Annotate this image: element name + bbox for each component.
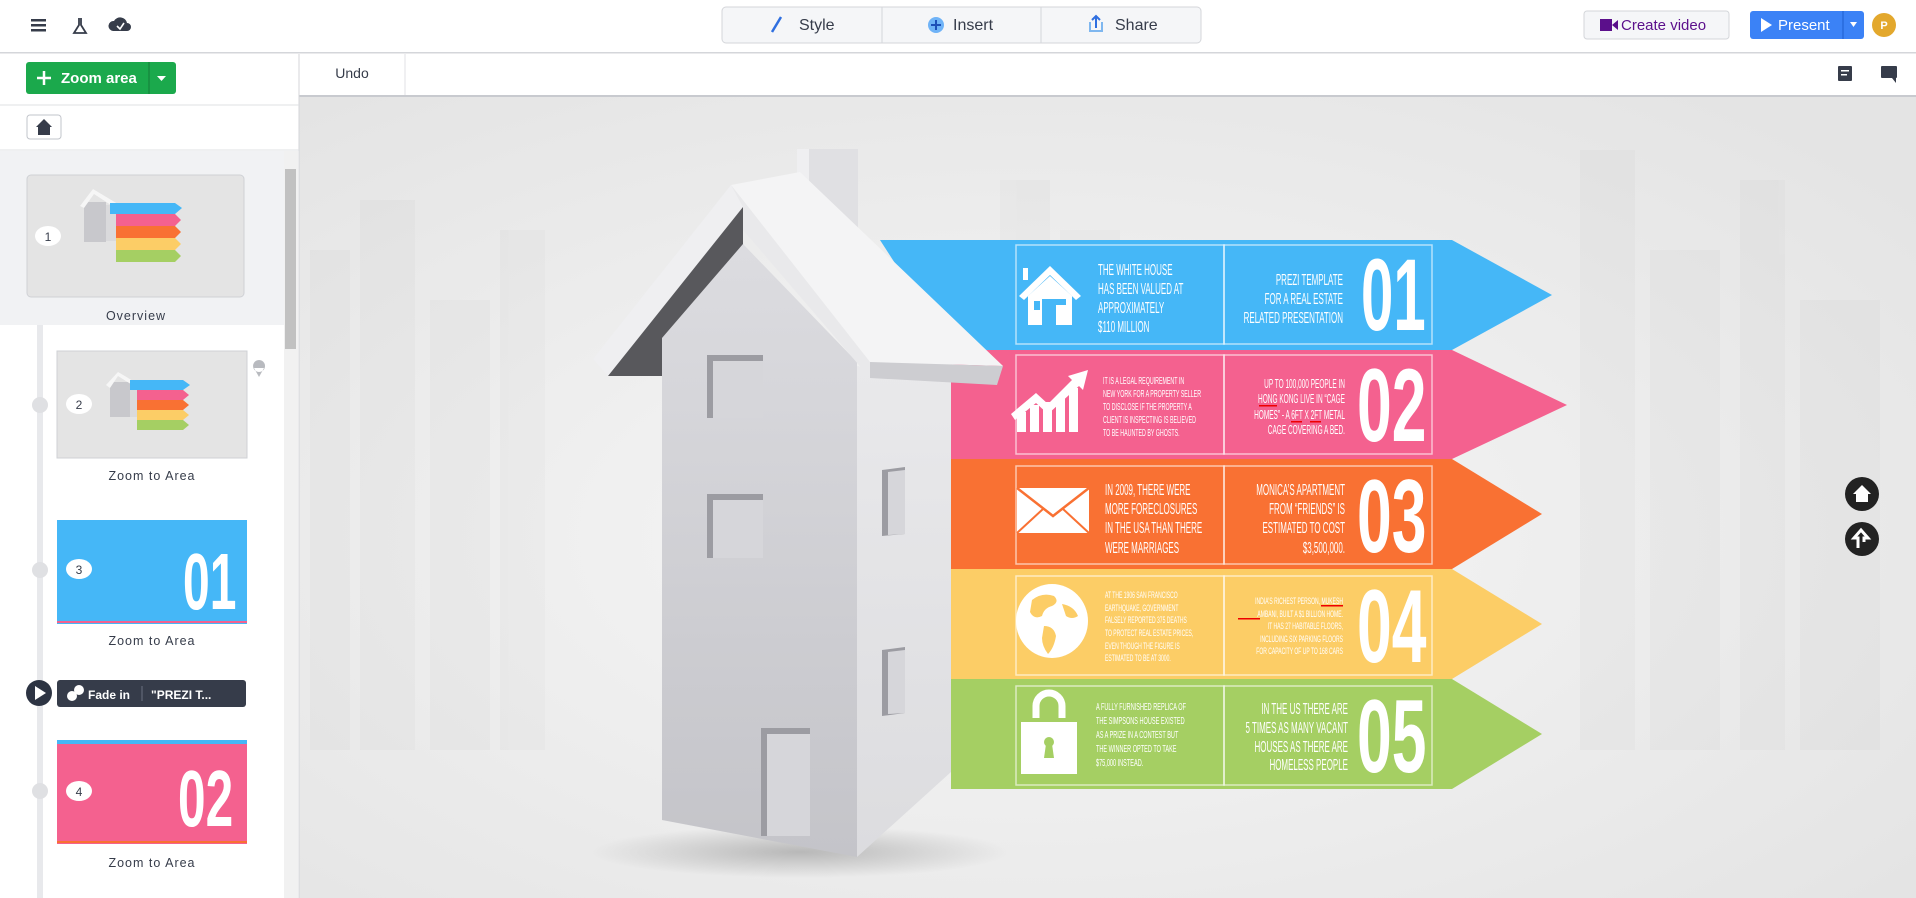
icon: house [1019, 266, 1081, 325]
band 3 orange [951, 459, 1542, 575]
thumbnail 2 [32, 351, 265, 458]
button: create video [1584, 11, 1729, 39]
text: foreclosures: WERE MARRIAGES [1105, 539, 1179, 557]
text: ambani: INDIA’S RICHEST PERSON, MUKESH [1255, 595, 1343, 606]
icon: flask [74, 18, 86, 33]
text: vacant houses [1245, 700, 1348, 774]
text: foreclosures [1105, 481, 1202, 557]
button: present: Present [1778, 17, 1831, 34]
text: cage homes [1254, 378, 1345, 438]
text: legal requirement: TO BE HAUNTED BY GHOSTS. [1103, 427, 1180, 438]
thumbnail 3: 01: 01 [183, 536, 236, 626]
number 02: 02 [1357, 348, 1426, 464]
icon: globe [1016, 584, 1088, 658]
canvas background [299, 96, 1916, 898]
label: overview: Overview [106, 309, 166, 323]
text: white house: $110 MILLION [1098, 318, 1149, 336]
band 5 green [951, 679, 1542, 795]
number 04: 04 [1357, 569, 1427, 685]
text: monica [1256, 481, 1345, 557]
thumbnail 1: overview [27, 175, 244, 297]
text: vacant houses: IN THE US THERE ARE [1261, 700, 1348, 718]
text: vacant houses: HOMELESS PEOPLE [1269, 756, 1348, 774]
timeline [37, 325, 43, 898]
scrollbar [284, 151, 298, 898]
canvas nav buttons [1845, 477, 1879, 556]
avatar: P [1880, 20, 1888, 32]
toolbar group: style insert share: Insert [953, 17, 994, 34]
text: simpsons: THE WINNER OPTED TO TAKE [1096, 742, 1177, 754]
button: home [27, 115, 61, 139]
band 2 pink [951, 348, 1567, 464]
thumbnail 3: 01 [32, 520, 247, 626]
text: legal requirement: CLIENT IS INSPECTING IS BELIEVED [1103, 414, 1196, 425]
animation bar: fade in: Fade in [88, 688, 130, 702]
text: legal requirement: NEW YORK FOR A PROPERTY SELLER [1103, 388, 1201, 399]
toolbar group: style insert share [722, 7, 1201, 43]
text: earthquake: TO PROTECT REAL ESTATE PRICES, [1105, 627, 1193, 638]
text: legal requirement [1103, 375, 1201, 438]
thumbnail 3: 01: 3 [76, 563, 83, 577]
text: simpsons: AS A PRIZE IN A CONTEST BUT [1096, 728, 1178, 740]
text: simpsons: THE SIMPSONS HOUSE EXISTED [1096, 714, 1185, 726]
text: legal requirement: TO DISCLOSE IF THE PROPERTY A [1103, 401, 1192, 412]
text: earthquake: EARTHQUAKE, GOVERNMENT [1105, 602, 1179, 613]
text: monica: MONICA’S APARTMENT [1256, 481, 1345, 499]
text: white house [1098, 261, 1184, 336]
text: earthquake: ESTIMATED TO BE AT 3000. [1105, 652, 1171, 663]
label: zoom to area 2: Zoom to Area [108, 469, 196, 483]
animation bar: fade in: "PREZI T... [151, 688, 211, 702]
button: zoom area [26, 62, 176, 94]
text: simpsons: $75,000 INSTEAD. [1096, 756, 1143, 768]
label: zoom to area 4: Zoom to Area [108, 856, 196, 870]
thumbnail 4: 02: 4 [76, 785, 83, 799]
text: vacant houses: 5 TIMES AS MANY VACANT [1245, 719, 1348, 737]
icon: lock [1021, 693, 1077, 774]
icon: cloud [108, 17, 131, 31]
text: ambani [1238, 595, 1343, 656]
house illustration [590, 149, 1010, 878]
text: monica: ESTIMATED TO COST [1262, 519, 1345, 537]
text: ambani: INCLUDING SIX PARKING FLOORS [1260, 633, 1343, 644]
number 03: 03 [1357, 459, 1426, 575]
thumbnail 1: overview: 1 [45, 230, 52, 244]
label: zoom to area 3: Zoom to Area [108, 634, 196, 648]
thumbnail 4: 02: 02 [178, 755, 233, 844]
button: present [1750, 11, 1864, 39]
text: foreclosures: IN 2009, THERE WERE [1105, 481, 1191, 499]
text: simpsons [1096, 700, 1186, 768]
text: earthquake: FALSELY REPORTED 375 DEATHS [1105, 614, 1187, 625]
text: cage homes: CAGE COVERING A BED. [1268, 424, 1345, 438]
text: prezi template [1244, 271, 1343, 327]
icon: chart [1011, 370, 1088, 432]
thumbnail 4: 02 [32, 740, 247, 844]
icon: envelope [1017, 488, 1089, 533]
text: ambani: AMBANI, BUILT A $1 BILLION HOME. [1257, 608, 1343, 619]
animation bar: fade in [26, 680, 246, 707]
text: ambani: FOR CAPACITY OF UP TO 168 CARS [1256, 645, 1343, 656]
toolbar group: style insert share: Style [799, 17, 835, 34]
secondary toolbar: Undo [335, 65, 369, 81]
text: earthquake: AT THE 1906 SAN FRANCISCO [1105, 589, 1178, 600]
text: legal requirement: IT IS A LEGAL REQUIREMENT IN [1103, 375, 1184, 386]
secondary toolbar [299, 54, 1916, 97]
icon: menu [31, 19, 46, 32]
text: prezi template: PREZI TEMPLATE [1276, 271, 1343, 289]
button: zoom area: Zoom area [61, 70, 138, 87]
sidebar [0, 54, 299, 898]
band 4 yellow [951, 569, 1542, 685]
text: monica: FROM “FRIENDS” IS [1269, 500, 1345, 518]
top bar [0, 0, 1916, 54]
text: foreclosures: IN THE USA THAN THERE [1105, 519, 1202, 537]
text: cage homes: UP TO 100,000 PEOPLE IN [1264, 378, 1345, 392]
text: foreclosures: MORE FORECLOSURES [1105, 500, 1197, 518]
text: white house: APPROXIMATELY [1098, 299, 1165, 317]
text: cage homes: HOMES” - A 6FT X 2FT METAL [1254, 409, 1345, 423]
number 01: 01 [1361, 238, 1426, 352]
band 1 blue [880, 238, 1552, 352]
text: white house: HAS BEEN VALUED AT [1098, 280, 1184, 298]
text: earthquake [1105, 589, 1193, 663]
text: cage homes: HONG KONG LIVE IN “CAGE [1258, 393, 1345, 407]
thumbnail 2: 2 [76, 398, 83, 412]
text: monica: $3,500,000. [1303, 539, 1345, 557]
text: earthquake: EVEN THOUGH THE FIGURE IS [1105, 640, 1180, 651]
text: vacant houses: HOUSES AS THERE ARE [1255, 738, 1348, 756]
text: prezi template: RELATED PRESENTATION [1244, 309, 1343, 327]
number 05: 05 [1357, 679, 1426, 795]
text: ambani: IT HAS 27 HABITABLE FLOORS, [1268, 620, 1343, 631]
avatar [1872, 13, 1896, 37]
text: white house: THE WHITE HOUSE [1098, 261, 1173, 279]
text: prezi template: FOR A REAL ESTATE [1265, 290, 1343, 308]
toolbar group: style insert share: Share [1115, 17, 1158, 34]
button: create video: Create video [1621, 17, 1706, 34]
text: simpsons: A FULLY FURNISHED REPLICA OF [1096, 700, 1186, 712]
